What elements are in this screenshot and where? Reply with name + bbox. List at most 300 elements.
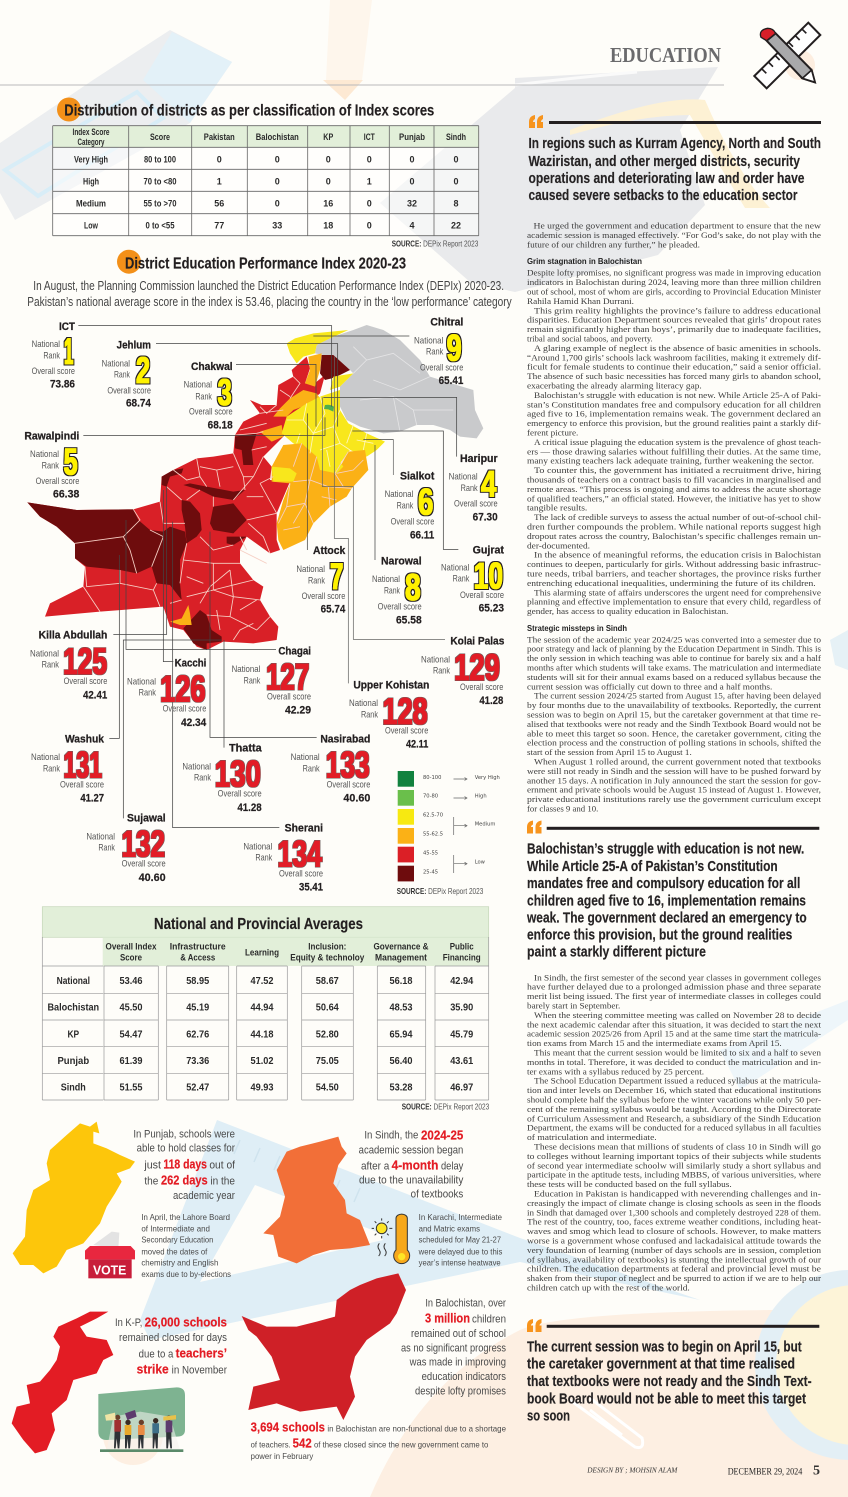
article text: Balochistan: remote areas. “This process is ongoing and aims to address the acute shortage [527,485,822,494]
table: distribution of districts: 0 [367,154,372,164]
label: Sherani: Rank [255,853,273,863]
label: Sujawal: Rank [98,843,115,853]
table: national and provincial averages: Equity & technoloy [290,953,364,963]
table: distribution of districts: 0 to <55 [146,220,174,230]
label: Killa Abdullah: Killa Abdullah [39,630,108,642]
article text: Sindh continued: months in total. Therefore, it was decided to conduct the matriculation and in- [527,1058,821,1067]
panel: K-P [12,1312,227,1453]
table: distribution of districts: 0 [453,176,459,186]
article text: Sindh continued: of second year intermediate schoolw will similarly study a short syllabus and [527,1161,821,1170]
table: distribution of districts: 0 [326,176,331,186]
label: Chagai [232,645,311,716]
text: non-functional schools: 542 [293,1436,312,1450]
table: national and provincial averages: 45.79 [450,1029,474,1040]
header: section title: EDUCATION [610,43,721,67]
label: Kolai Palas: Rank [433,666,450,676]
text: Karachi heatwave: and Matric exams [419,1223,481,1233]
heading: distribution of districts: Distribution of districts as per classification of Index scores [64,103,434,120]
table title band [42,907,489,937]
label: Jehlum [102,339,152,410]
table: national and provincial averages: Management [375,953,427,963]
article text: Balochistan: many existing teachers lack adequate training, further weakening the sector. [527,457,814,466]
label: Chakwal: National [184,380,212,390]
table: distribution of districts: 0 [275,154,280,164]
table: distribution of districts [53,126,479,236]
article text: Sindh continued: These decisions mean that millions of students of class 10 in Sindh will go [534,1142,821,1152]
article text: Balochistan: This grim reality highlights the province’s failure to address educational [534,306,822,315]
label: Chitral: 65.41 [439,375,463,387]
article text: Sindh continued: The rest of the country, too, faces extreme weather conditions, including heat- [527,1218,821,1227]
text: non-functional schools [251,1421,506,1461]
map of Pakistan by district score [27,325,483,650]
label: Washuk: Rank [43,763,60,773]
article text: Sindh continued: have further delayed due to a prolonged admission phase and three separate [527,983,822,992]
article text: Sindh continued: tion and inter levels on December 16, which stated that educational institutions [527,1086,821,1095]
label: Sujawal: Overall score [122,859,166,869]
table: distribution of districts: 77 [214,220,224,230]
table: national and provincial averages: Balochistan [47,1003,99,1014]
pull quote 1: Waziristan, and other merged districts, security [528,154,800,170]
text: Sindh session [359,1128,464,1201]
table: national and provincial averages: 73.36 [186,1056,210,1067]
article text: Balochistan: ferent picture. [527,428,578,438]
text: K-P strike: due to a [139,1348,174,1360]
label: Attock: National [296,564,325,574]
article text: Balochistan: of qualified teachers,” an official stated. However, the initiative has yet to show [527,494,821,503]
article text: Sindh continued: In Sindh, the first semester of the second year classes in government colleges [534,973,821,982]
text: K-P strike: teachers’ [176,1346,227,1360]
text: K-P strike: in November [172,1364,227,1376]
text: Balochistan out of school: despite lofty promises [415,1385,506,1397]
table: national and provincial averages: 45.19 [186,1003,210,1014]
table: national and provincial averages: Score [120,953,142,963]
map legend: Medium [475,822,495,828]
text: Balochistan out of school: 3 million [425,1312,470,1326]
label: Chagai: Chagai [278,645,311,657]
table: distribution of districts: Index Score [72,127,110,137]
table: distribution of districts: 70 to <80 [144,176,176,186]
subheading: Sindh: Strategic missteps in Sindh [527,624,627,633]
article text: Balochistan: To counter this, the government has initiated a recruitment drive, hiring [534,466,821,475]
article text: Sindh continued: tion exams from March 15 and the intermediate exams from April 15. [527,1039,782,1048]
text: Lahore Board: of Intermediate and [141,1223,210,1233]
article text: Balochistan: thousands of teachers on a contract basis to fill vacancies in marginalised and [527,476,821,484]
label: Thatta [182,743,263,814]
table: distribution of districts: 56 [214,199,224,209]
table: national and provincial averages: 61.39 [120,1056,143,1067]
table: distribution of districts: Category [78,137,104,147]
text: Sindh session: In Sindh, the [364,1129,418,1141]
table: distribution of districts: ICT [364,132,375,142]
pull quote 2: enforce this provision, but the ground realities [527,928,792,944]
label: Sialkot: 66.11 [410,529,434,541]
article text: Sindh continued [527,973,822,1292]
label: Haripur: Haripur [460,453,498,465]
label: Washuk: National [31,752,60,762]
table: national and provincial averages: 43.61 [450,1056,474,1067]
table: distribution of districts: Score [150,132,170,142]
article text: Sindh continued: Education in Pakistan is handicapped with neverending challenges and in- [534,1190,821,1198]
icon: pencil and ruler [754,23,820,88]
table: national and provincial averages: 45.50 [120,1003,143,1014]
label: Narowal: Overall score [378,602,422,612]
label: Rawalpindi: 66.38 [53,489,79,501]
table: national and provincial averages: Infrastructure [170,941,226,951]
panel: Punjab [13,1122,236,1279]
table: national and provincial averages: 49.93 [250,1083,274,1094]
footer: page number: 5 [813,1464,820,1479]
text: Lahore Board [141,1212,232,1279]
text: Punjab days: just [143,1159,161,1171]
article text: Sindh continued: should complete half the syllabus before the winter vacations while only 50 per- [527,1096,821,1104]
article text: Sindh continued: children catch up with the rest of the world. [527,1284,690,1292]
label: Sujawal: 132 [121,823,165,865]
article text: Sindh continued: barely start in September. [527,1002,620,1010]
article text: Balochistan: ers — those drawing salaries without fulfilling their duties. At the same time, [527,447,821,456]
table: national and provincial averages: 42.94 [450,976,474,987]
table: national and provincial averages: 75.05 [316,1056,339,1067]
article text: Balochistan: out of school, most of whom are girls, according to Provincial Education Minister [527,288,821,296]
text: K-P strike: 26,000 schools [145,1316,227,1330]
label: Upper Kohistan: 42.11 [406,739,428,751]
label: ICT: Overall score [32,366,75,376]
map legend: 70-80 [423,794,438,800]
label: Sialkot: Overall score [391,516,434,526]
label: Chagai: 127 [266,656,309,698]
label: Rawalpindi: 5 [64,441,78,483]
article text: Balochistan: planning and effective implementation to ensure that every child, regardless of [527,598,821,607]
icon: quote mark [527,1319,542,1332]
article text: Balochistan: Despite lofty promises, no significant progress was made in improving education [527,269,821,278]
pull quote 3: the caretaker government at that time realised [527,1357,795,1373]
article text: Sindh: The current session 2024/25 started from August 15, after having been delayed [534,692,821,701]
table: distribution of districts: 55 to >70 [144,199,176,209]
label: Chitral: Chitral [430,316,463,328]
label: Sujawal: Sujawal [127,813,166,825]
label: Jehlum: Overall score [107,385,151,395]
icon: ballot box [85,1232,135,1278]
label: Gujrat [441,544,504,615]
label: Upper Kohistan: Overall score [385,726,428,736]
text: Lahore Board: chemistry and English [141,1258,218,1268]
table: distribution of districts: 4 [409,220,415,230]
label: Gujrat: Gujrat [473,544,504,556]
article text: Balochistan: The absence of such basic necessities has forced many girls to abandon school, [527,372,821,381]
label: Kacchi: 42.34 [181,717,207,729]
text: Balochistan out of school: as no significant progress [401,1342,506,1354]
table: national and provincial averages: 47.52 [250,976,274,987]
source note: SOURCE: DEPix Report 2023 [392,240,479,249]
article text: Sindh: alised that textbooks were not ready and the Sindh Textbook Board would not be [527,720,822,729]
article text: Sindh continued: ter exams with a syllabus reduced by 25 percent. [527,1067,704,1076]
intro text: Pakistan’s national average score in the index is 53.46, placing the country in the ‘low performance’ category [27,294,512,309]
label: Thatta: 130 [215,753,261,795]
table: distribution of districts: 22 [451,220,461,230]
table: distribution of districts: 0 [409,176,415,186]
leader lines [78,326,458,828]
article text: Balochistan: entrenching educational inequalities, undermining the future of its children. [527,579,816,588]
text: Lahore Board: moved the dates of [141,1246,208,1256]
map legend: Low [475,860,486,866]
heading: district education performance index: District Education Performance Index 2020-23 [125,255,406,272]
label: Haripur: 4 [481,463,497,505]
article text: opening [527,222,822,250]
table: national and provincial averages: 48.53 [390,1003,413,1014]
article text: Sindh: ernment and private schools would be August 15 instead of August 1. However, [527,786,821,795]
label: Thatta: Overall score [218,789,262,799]
table: national and provincial averages: Overall Index [106,941,156,951]
article text: Sindh continued: to colleges without learning important topics of their subjects while students [527,1152,821,1161]
label: Attock: 65.74 [321,604,346,616]
label: ICT: Rank [43,350,60,360]
label: Chagai: Rank [244,675,261,685]
label: Kacchi: Kacchi [175,658,206,670]
label: Kacchi [127,658,207,729]
label: Gujrat: 10 [474,554,503,596]
article text: Balochistan: ture needs, tribal barriers, and teacher shortages, the province risks further [527,570,821,578]
text: Sindh session: delay [441,1160,464,1172]
article text: Balochistan: aged five to 16, implementation remains weak. The government declared an [527,410,821,419]
table: distribution of districts: 0 [453,154,459,164]
table: national and provincial averages: National [57,976,90,987]
table: national and provincial averages: 51.55 [120,1083,143,1094]
article text: Sindh continued: merit list being issued. The first year of intermediate classes in colleges could [527,992,821,1001]
text: Lahore Board: In April, the Lahore Board [141,1212,230,1222]
pull quote 1 [528,115,821,204]
intro text [27,278,512,309]
table: national and provincial averages: 51.02 [250,1056,274,1067]
article text: Sindh continued: the next academic calendar after this situation, it was decided to start the next [527,1020,822,1029]
label: Narowal: Narowal [381,556,422,568]
table: national and provincial averages: 52.47 [186,1083,210,1094]
table: national and provincial averages: 54.50 [316,1083,339,1094]
label: Upper Kohistan: National [349,698,378,708]
map legend: High [475,794,487,800]
label: ICT: 73.86 [50,378,75,390]
article text: Sindh: able to meet this target so soon. Hence, the caretaker government, citing the [527,729,822,738]
map legend: 62.5-70 [423,813,443,819]
map: K-P [12,1312,113,1453]
article text: Balochistan: A critical issue plaguing the education system is the prevalence of ghost teach- [534,438,821,447]
text: non-functional schools: 3,694 schools [251,1421,325,1435]
label: Kolai Palas: Kolai Palas [450,636,504,648]
article text: Sindh [527,635,822,814]
table: distribution of districts: 0 [326,154,331,164]
label: Nasirabad: 133 [326,743,370,785]
map legend: 55-62.5 [423,832,443,838]
table: distribution of districts: 0 [367,199,372,209]
label: Chakwal: Chakwal [191,361,233,373]
label: Chakwal: Rank [195,391,212,401]
label: Nasirabad: Overall score [327,779,370,789]
label: Haripur: Rank [461,483,478,493]
text: Balochistan out of school: was made in improving [409,1357,506,1369]
text: Karachi heatwave: In Karachi, Intermediate [419,1212,502,1222]
table: distribution of districts: KP [323,132,333,142]
pull quote 3: so soon [527,1408,570,1424]
map legend: 80-100 [423,775,441,781]
table: distribution of districts: 80 to 100 [144,154,176,164]
article text: Sindh continued: The School Education Department issued a reduced syllabus at the matricula- [534,1077,821,1086]
article text: opening: He urged the government and education department to ensure that the new [534,222,821,230]
label: Narowal: 65.58 [396,615,422,627]
article text: Balochistan: dropout rates across the country, Balochistan’s specific challenges remain un- [527,532,821,541]
article text: Sindh continued: very foundation of learning (number of days schools are in session, completion [527,1246,821,1255]
label: Sherani [243,823,323,894]
label: ICT: National [32,339,60,349]
table title band: National and Provincial Averages [154,916,363,933]
table: national and provincial averages: 44.18 [250,1029,274,1040]
pull quote 2: While Article 25-A of Pakistan’s Constitution [527,859,778,875]
label: Kacchi: 126 [160,668,206,710]
icon: ballot box: VOTE [93,1264,126,1278]
label: Upper Kohistan: Upper Kohistan [353,679,430,691]
label: Nasirabad [291,733,370,805]
article text: Sindh: session was to begin on April 15, but the caretaker government at that time re- [527,710,821,720]
table: national and provincial averages: 56.18 [390,976,413,987]
label: Attock: 7 [330,555,343,597]
text: Sindh session: due to the unavailability [359,1175,464,1187]
table: distribution of districts: 32 [407,199,417,209]
article text: Balochistan: tangible results. [527,504,587,513]
label: Washuk: Overall score [60,779,104,789]
article text: Balochistan: emergency to enforce this provision, but the ground realities paint a starkly dif- [527,419,821,428]
label: Rawalpindi: Rawalpindi [24,430,79,442]
text: Punjab days: the [144,1175,158,1187]
text: Karachi heatwave: scheduled for May 21-27 [419,1235,501,1245]
article text: Balochistan: A glaring example of neglect is the absence of basic amenities in schools. [534,344,821,353]
text: K-P strike: remained closed for days [119,1332,227,1344]
label: Chitral [414,316,463,387]
label: Chakwal: Overall score [189,407,233,417]
article text: Balochistan: tribal and social taboos, and poverty. [527,334,653,344]
table: national and provincial averages: 58.95 [186,976,210,987]
text: Karachi heatwave [418,1212,503,1268]
label: Rawalpindi: Overall score [36,476,79,486]
illustration: protesting teachers [98,1387,185,1452]
label: Rawalpindi: Rank [42,460,59,470]
label: Attock [296,545,346,616]
article text: Balochistan: “Around 1,700 girls’ schools lack washroom facilities, making it extremely dif- [527,353,821,362]
table: national and provincial averages: Governance & [374,941,429,951]
label: Sujawal: National [86,831,115,841]
map: Punjab [13,1122,135,1273]
source note: SOURCE: DEPix Report 2023 [397,886,484,896]
map legend [398,771,500,881]
text: non-functional schools: of teachers. [251,1439,291,1449]
article text: Sindh continued: worse is a government whose confused and lackadaisical attitude towards the [527,1236,822,1246]
text: Punjab days [133,1128,236,1202]
article text: Sindh: were still not ready in Sindh and the session will have to be pushed forward by [527,767,821,776]
article text: Balochistan: Rahila Hamid Khan Durrani. [527,297,634,306]
label: Jehlum: 68.74 [126,398,152,410]
footer: date: DECEMBER 29, 2024 [728,1467,803,1477]
article text: opening: academic session is managed effectively. “For God’s sake, do not play with the [527,231,822,240]
article text: Balochistan: indicators in Balochistan during 2024, leaving more than three million children [527,278,821,287]
pull quote 3 [527,1319,819,1424]
text: Balochistan out of school: children [472,1314,506,1326]
label: Sherani: Sherani [285,823,323,835]
label: Rawalpindi: National [30,449,59,459]
article text: Balochistan: gender, has access to quality education in Balochistan. [527,607,728,616]
article text: Sindh: by four months due to the unavailability of textbooks. Reportedly, the current [527,701,822,710]
label: Kolai Palas: 41.28 [479,695,503,707]
table: distribution of districts: 0 [217,154,222,164]
article text: Balochistan: Balochistan’s struggle with education is not new. While Article 25-A of Paki- [534,391,821,400]
table: distribution of districts: Sindh [446,132,466,142]
label: Kacchi: National [127,676,156,686]
table: distribution of districts: 0 [409,154,415,164]
pull quote 2: paint a starkly different picture [527,945,706,961]
label: Kacchi: Overall score [163,704,206,714]
table: distribution of districts: 0 [275,199,280,209]
label: Chakwal: 68.18 [208,419,233,431]
footer: design credit: DESIGN BY ; MOHSIN ALAM [586,1466,678,1475]
label: Kolai Palas: 129 [454,646,500,688]
label: ICT: 1 [64,330,73,372]
label: Chagai: Overall score [267,691,311,701]
table: national and provincial averages [42,907,489,1100]
text: non-functional schools: power in February [251,1451,314,1461]
article text: Sindh continued: of syllabus, availability of textbooks) is stunting the intellectual growth of our [527,1255,821,1264]
label: ICT [32,321,75,390]
label: Jehlum: Jehlum [117,339,151,351]
label: Attock: Rank [308,575,325,585]
text: Balochistan out of school: remained out of school [411,1328,506,1340]
pull quote 2 [526,820,819,961]
label: Killa Abdullah: Overall score [64,676,107,686]
label: Chitral: 9 [447,327,462,369]
table: national and provincial averages: Public [450,941,474,951]
label: Chakwal [184,361,233,431]
label: Sialkot [385,471,435,541]
table: national and provincial averages: Financing [443,953,481,963]
text: Lahore Board: exams due to by-elections [141,1269,232,1279]
panel: Sindh [263,1128,503,1268]
heading: distribution of districts [57,98,434,122]
label: Killa Abdullah: 125 [63,640,107,682]
table: distribution of districts: 33 [272,220,282,230]
article text: Balochistan: stan’s Constitution mandates free and compulsory education for all children [527,400,821,409]
article text: Sindh: The session of the academic year 2024/25 was converted into a semester due to [527,635,821,644]
text: Balochistan out of school [401,1298,506,1397]
text: Punjab days: academic year [173,1190,235,1202]
label: Upper Kohistan: Rank [361,709,378,719]
article text: Sindh continued: cent of the remaining syllabus would be taught. According to the Directorate [527,1105,822,1114]
article text: Balochistan [527,269,822,616]
label: Nasirabad: National [291,752,320,762]
article text: Sindh: current session was officially cut down to three and a half months. [527,682,772,691]
article text: Balochistan: The lack of credible surveys to assess the actual number of out-of-school chil- [534,513,821,522]
article text: Sindh: election process and the construction of polling stations in schools, shifted the [527,739,822,748]
label: Narowal: National [372,574,400,584]
text: non-functional schools: in Balochistan are non-functional due to a shortage [327,1424,506,1434]
article text: Sindh: private educational institutions rarely use the government curriculum except [527,795,822,804]
label: Killa Abdullah: 42.41 [83,689,107,701]
label: Chagai: National [232,664,260,674]
text: Punjab days: In Punjab, schools were [133,1128,235,1140]
article text: Balochistan: In the absence of meaningful reforms, the education crisis in Balochistan [534,551,821,560]
article text: Balochistan: der-documented. [527,541,590,550]
article text: Sindh continued: in Sindh that damaged over 1,300 schools and completely destroyed 228 of them. [527,1208,821,1217]
text: Sindh session: after a [361,1160,390,1172]
heading: district education performance index [117,250,406,274]
text: Sindh session: of textbooks [411,1189,464,1201]
text: Sindh session: academic session began [359,1144,463,1156]
label: Kolai Palas: National [421,654,450,664]
map: Balochistan [242,1273,406,1420]
table: distribution of districts: Medium [76,199,106,209]
